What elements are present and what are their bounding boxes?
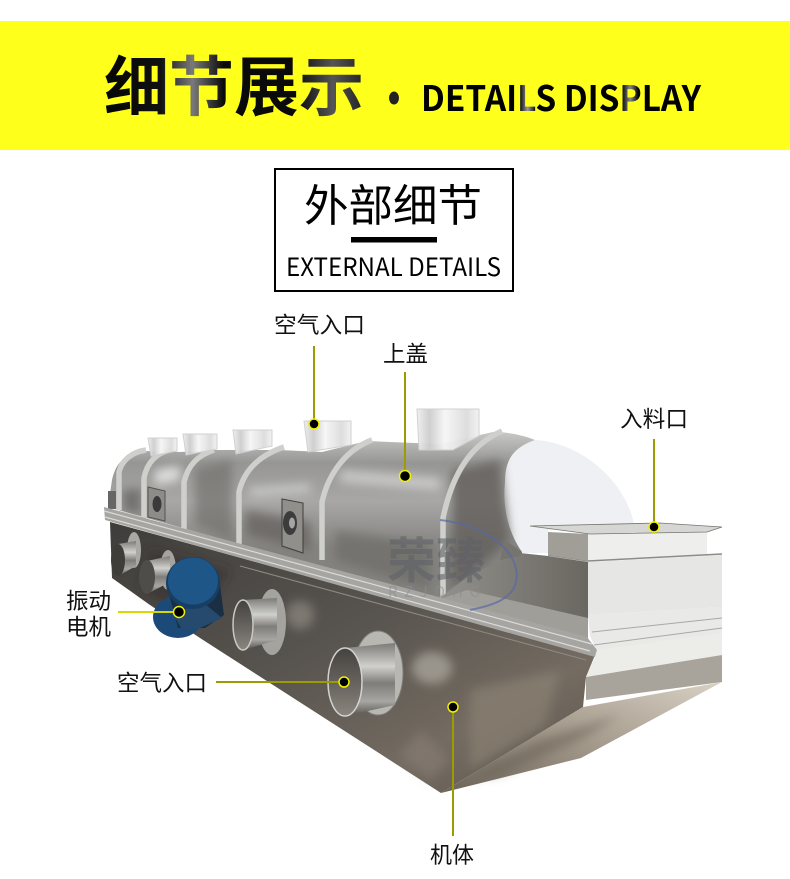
seam band lines <box>592 618 722 645</box>
pipe 2 <box>139 550 176 594</box>
underside stain <box>470 715 620 778</box>
left end cap <box>108 491 116 509</box>
upper feed box front <box>588 532 707 561</box>
machine illustration: vibrating fluid bed <box>104 409 722 793</box>
vibration motor <box>153 557 224 638</box>
hopper side <box>110 522 595 793</box>
white dome base overlap <box>500 540 522 560</box>
lower front metal band <box>586 655 722 700</box>
callout: top air inlet: 空气入口 <box>274 308 365 340</box>
callout: upper cover <box>383 337 428 482</box>
pipe 1 <box>111 532 141 576</box>
rail lines <box>104 511 592 651</box>
hood ribs <box>119 431 502 600</box>
pipe 3 <box>233 589 286 655</box>
hood shading <box>122 460 510 590</box>
watermark logo: 荣臻 <box>387 522 485 593</box>
pipe 4 <box>328 631 403 716</box>
watermark logo: RZJDHG <box>388 581 480 602</box>
callout: machine body: 机体 <box>430 838 474 870</box>
hopper end underside <box>441 682 722 793</box>
front metal band <box>586 633 722 677</box>
callout: lower air inlet <box>117 666 349 698</box>
callout: feed inlet: 入料口 <box>620 402 688 434</box>
lower feed box <box>588 555 722 615</box>
callout: machine body <box>430 702 474 870</box>
watermark logo <box>387 520 517 610</box>
callout: feed inlet <box>620 402 688 532</box>
hopper shading <box>140 550 560 780</box>
callout: top air inlet <box>274 308 365 429</box>
callout: upper cover: 上盖 <box>383 337 428 369</box>
yellow header band <box>0 21 790 150</box>
hood body <box>108 432 535 625</box>
title separator dot <box>389 92 399 104</box>
callout: vibration motor <box>66 584 184 642</box>
inspection door large <box>282 499 303 553</box>
callout: vibration motor: 振动 <box>66 584 111 616</box>
title: 细节展示: 细节展示 <box>104 35 364 129</box>
feed side lower strip <box>437 590 588 640</box>
inspection door small <box>148 487 165 521</box>
flange rail <box>104 507 597 657</box>
english title: DETAILS DISPLAY: DETAILS DISPLAY <box>421 71 702 122</box>
upper feed box side <box>548 532 588 561</box>
white end dome <box>503 440 634 553</box>
air chimneys <box>148 409 479 456</box>
section heading english: EXTERNAL DETAILS <box>286 248 501 284</box>
feed inlet lip <box>530 523 722 534</box>
section heading chinese: 外部细节 <box>304 170 482 234</box>
callout: vibration motor: 电机 <box>66 610 111 642</box>
feed box seam <box>548 554 722 561</box>
section heading box <box>275 169 513 291</box>
feed side wall <box>437 553 588 640</box>
white seam band <box>588 607 722 652</box>
hopper seam highlight <box>240 566 586 660</box>
heading underline bar <box>351 237 437 242</box>
callout: lower air inlet: 空气入口 <box>117 666 207 698</box>
